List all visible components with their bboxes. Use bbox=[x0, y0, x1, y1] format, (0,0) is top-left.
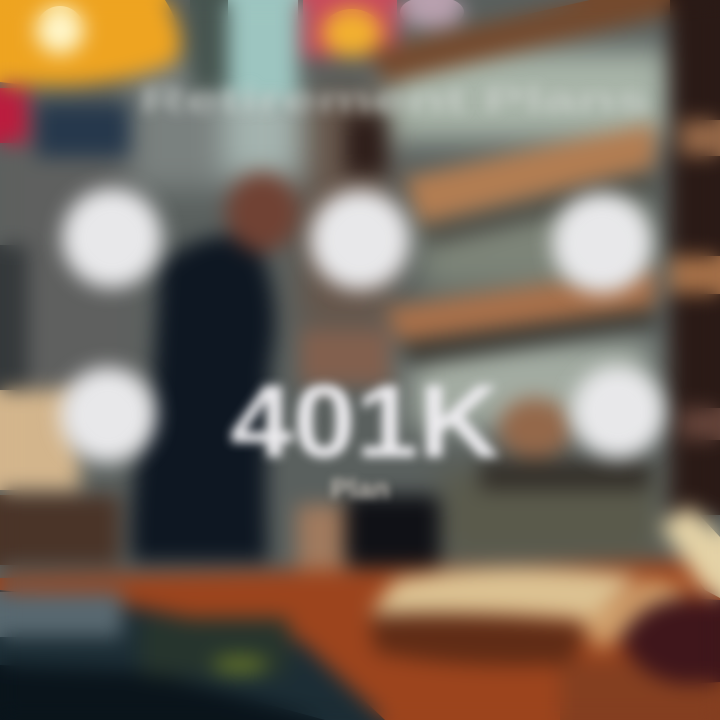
right cabinet column bbox=[670, 0, 720, 515]
person bbox=[131, 172, 390, 562]
circle: bottom right bbox=[572, 366, 664, 458]
shelves bbox=[370, 0, 680, 367]
foreground dark device bbox=[0, 590, 385, 720]
book on desk bbox=[370, 568, 640, 666]
paper and dark red object at right bbox=[580, 505, 720, 684]
circle: bottom left bbox=[60, 367, 156, 463]
caption under 401K: Plan bbox=[330, 473, 390, 504]
top blurred text line: Retirement Plans bbox=[140, 79, 650, 120]
circle: top centre bbox=[310, 190, 410, 290]
heading: 401K: 401K bbox=[230, 364, 500, 480]
circle: top right bbox=[552, 193, 652, 293]
lamp: left yellow bbox=[0, 0, 181, 86]
circle: top left bbox=[62, 188, 162, 288]
lamp: centre orange bbox=[303, 0, 464, 175]
red and navy objects bbox=[0, 88, 130, 157]
desk surface bbox=[0, 560, 720, 720]
white circles bbox=[60, 188, 664, 463]
desk items: cups and mugs bbox=[297, 398, 650, 570]
